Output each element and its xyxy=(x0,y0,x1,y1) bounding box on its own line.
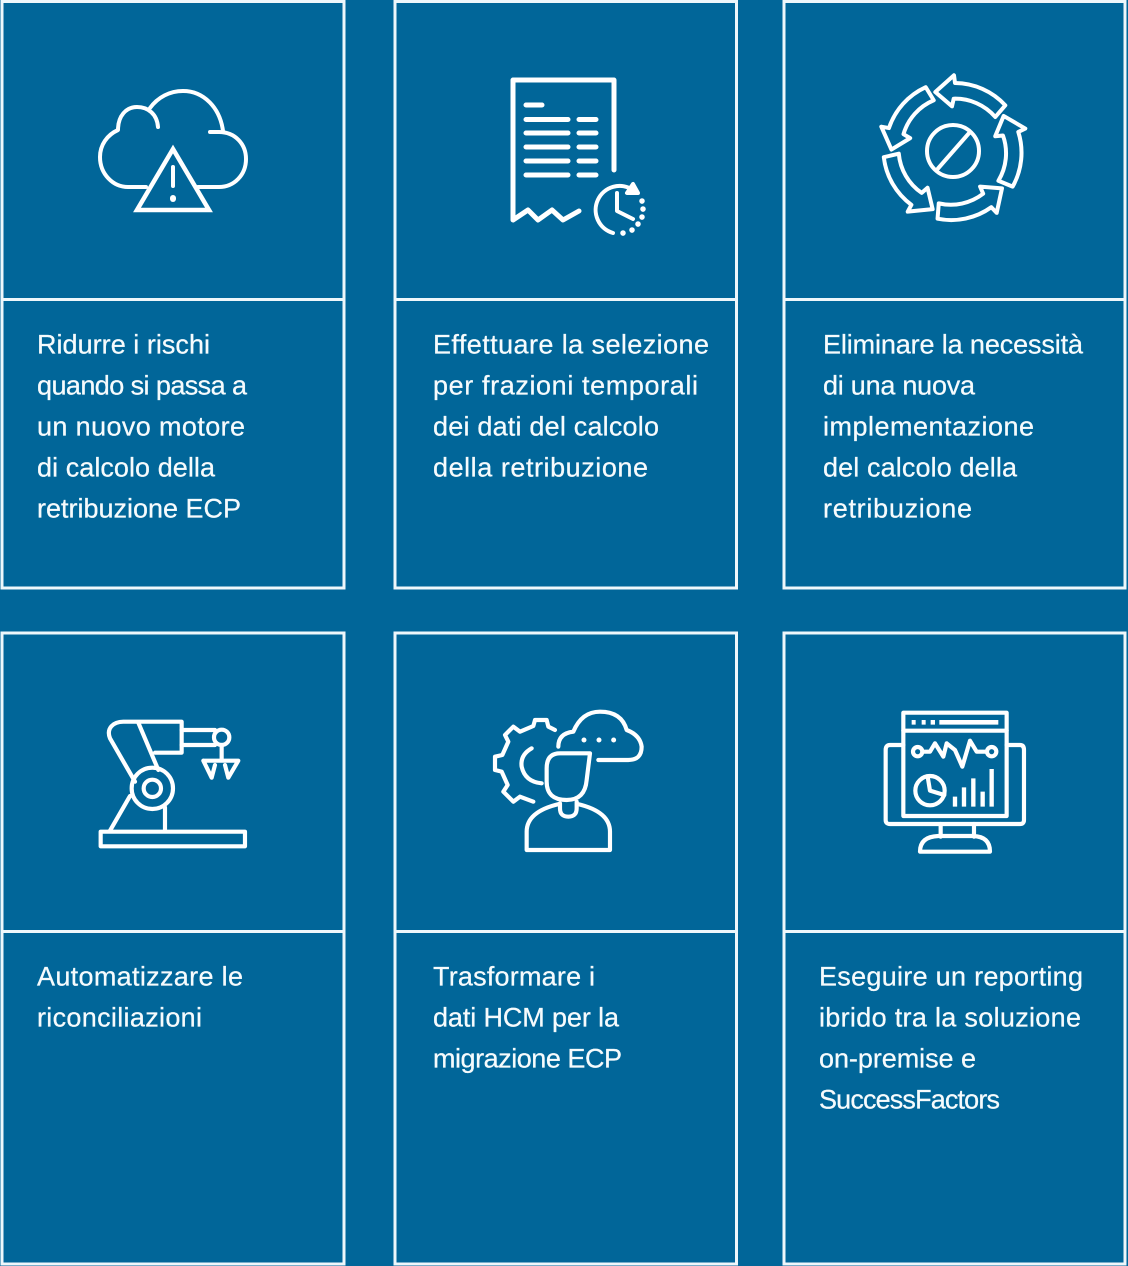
text: effettuare la selezione: per frazioni temporali xyxy=(433,370,698,400)
text: trasformare i dati: migrazione ECP xyxy=(433,1044,622,1074)
text: ridurre i rischi xyxy=(37,330,248,524)
text: eseguire un reporting: ibrido tra la soluzione xyxy=(819,1002,1081,1032)
text: eseguire un reporting xyxy=(819,962,1083,1114)
text: automatizzare: Automatizzare le xyxy=(37,962,243,992)
text: eliminare la necessita: retribuzione xyxy=(823,494,972,524)
icon: receipt with clock xyxy=(513,80,643,233)
panel: reporting ibrido xyxy=(784,633,1125,1264)
panel: automatizzare le riconciliazioni xyxy=(2,633,344,1264)
text: effettuare la selezione: Effettuare la selezione xyxy=(433,330,709,360)
text: trasformare i dati: dati HCM per la xyxy=(433,1002,620,1032)
panel: trasformare i dati HCM xyxy=(395,633,736,1264)
text: eseguire un reporting: SuccessFactors xyxy=(819,1084,1000,1114)
text: eliminare la necessita xyxy=(823,330,1084,524)
icon: cycle arrows with prohibition sign xyxy=(866,75,1041,243)
text: eliminare la necessita: di una nuova xyxy=(823,370,976,400)
text: eliminare la necessita: Eliminare la necessità xyxy=(823,330,1084,360)
text: automatizzare: riconciliazioni xyxy=(37,1002,202,1032)
text: trasformare i dati xyxy=(433,962,622,1074)
text: effettuare la selezione: dei dati del calcolo xyxy=(433,412,659,442)
icon: cloud with warning triangle xyxy=(100,91,246,210)
icon: robotic arm xyxy=(101,722,245,846)
text: ridurre i rischi: quando si passa a xyxy=(37,370,248,400)
text: eseguire un reporting: Eseguire un reporting xyxy=(819,962,1083,992)
panel: selezione per frazioni temporali xyxy=(395,2,736,588)
text: ridurre i rischi: di calcolo della xyxy=(37,452,216,482)
text: effettuare la selezione: della retribuzione xyxy=(433,452,648,482)
text: ridurre i rischi: Ridurre i rischi xyxy=(37,330,210,360)
text: automatizzare xyxy=(37,962,243,1032)
panel: eliminare la necessita xyxy=(784,2,1125,588)
text: eliminare la necessita: del calcolo della xyxy=(823,452,1018,482)
text: trasformare i dati: Trasformare i xyxy=(433,962,595,992)
text: effettuare la selezione xyxy=(433,330,709,482)
text: eseguire un reporting: on-premise e xyxy=(819,1044,976,1074)
icon: person with gear and cloud xyxy=(495,712,642,850)
text: ridurre i rischi: retribuzione ECP xyxy=(37,494,241,524)
text: eliminare la necessita: implementazione xyxy=(823,412,1034,442)
icon: monitor with dashboard xyxy=(886,713,1024,852)
text: ridurre i rischi: un nuovo motore xyxy=(37,412,245,442)
panel: ridurre i rischi xyxy=(2,2,344,588)
